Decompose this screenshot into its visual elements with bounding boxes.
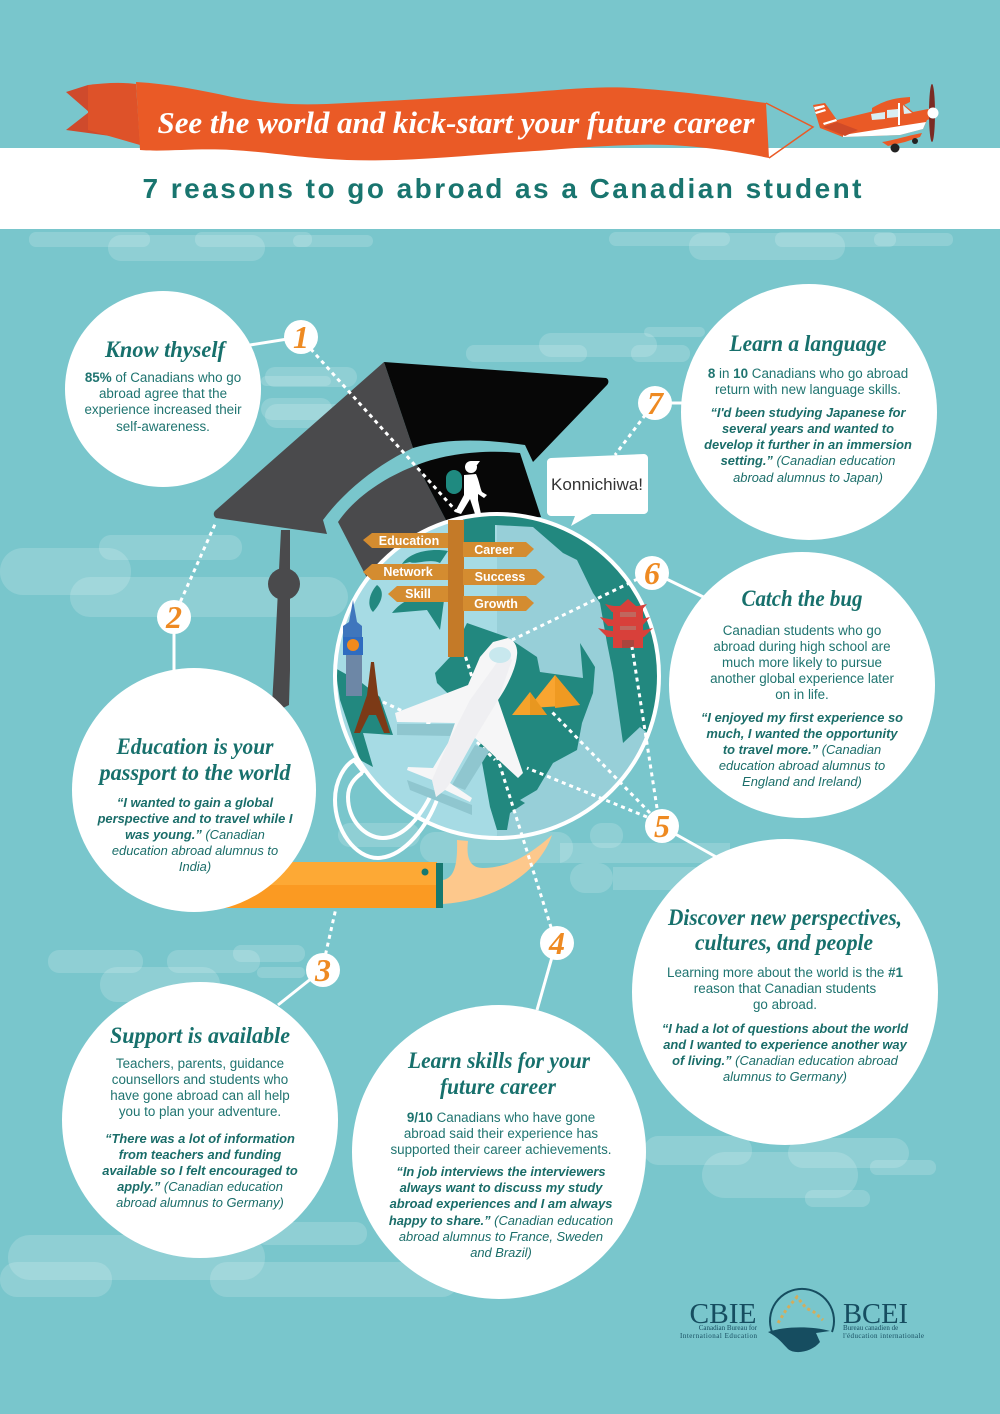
panel 5: Discover new perspectives [632, 839, 938, 1145]
panel 3: Support is available: abroad alumnus to Germany) [116, 1195, 284, 1210]
CBIE BCEI logo: Canadian Bureau for [699, 1324, 758, 1332]
speech bubble: Konnichiwa: Konnichiwa! [551, 476, 643, 494]
panel 7: Learn a language: abroad alumnus to Japan) [733, 470, 883, 485]
banner ribbon with title [66, 82, 813, 160]
panel 2: Education is your passport: perspective and to travel while I [97, 811, 293, 826]
panel 7: Learn a language: develop it further in an immersion [704, 437, 912, 452]
panel 4: Learn skills for your future career [352, 1005, 646, 1299]
panel 4: Learn skills for your future career: supported their career achievements. [390, 1142, 612, 1157]
panel 4: Learn skills for your future career: 9/10 Canadians who have gone [407, 1110, 595, 1125]
panel 4: Learn skills for your future career: “In job interviews the interviewers [396, 1164, 606, 1179]
CBIE BCEI logo: CBIE [690, 1298, 756, 1330]
panel 7: Learn a language [681, 284, 937, 540]
panel 7: Learn a language: Learn a language [729, 331, 886, 356]
panel 6: Catch the bug: another global experience later [710, 671, 894, 686]
panel 6: Catch the bug: much, I wanted the opportunity [706, 726, 898, 741]
icon: pyramids [512, 675, 580, 715]
panel 3: Support is available: counsellors and students who [112, 1072, 288, 1087]
panel 2: Education is your passport: India) [179, 859, 211, 874]
badge 6: 6 [644, 555, 660, 591]
panel 3: Support is available: Teachers, parents, guidance [116, 1056, 284, 1071]
panel 6: Catch the bug: “I enjoyed my first experience so [701, 710, 903, 725]
panel 1: Know thyself: Know thyself [104, 337, 227, 362]
graduation cap [214, 362, 608, 709]
panel 6: Catch the bug [669, 552, 935, 818]
panel 5: Discover new perspectives: reason that Canadian students [694, 981, 876, 996]
badge 2: 2 [165, 599, 182, 635]
panel 4: Learn skills for your future career: abroad experiences and I am always [390, 1196, 612, 1211]
panel 4: Learn skills for your future career: abroad said their experience has [404, 1126, 598, 1141]
panel 4: Learn skills for your future career: future career [440, 1074, 557, 1099]
panel 6: Catch the bug: Canadian students who go [723, 623, 881, 638]
panel 5: Discover new perspectives: go abroad. [753, 997, 817, 1012]
panel 6: Catch the bug: to travel more.” (Canadian [723, 742, 881, 757]
panel 3: Support is available: Support is available [110, 1023, 290, 1048]
signpost with labels: Skill [405, 587, 431, 601]
badge 3 [306, 952, 340, 988]
panel 6: Catch the bug: much more likely to pursue [722, 655, 882, 670]
panel 1: Know thyself: 85% of Canadians who go [85, 370, 241, 385]
flight trail loops [335, 760, 438, 858]
banner ribbon with title: See the world and kick-start your future career [158, 105, 755, 140]
badge 1: 1 [293, 319, 309, 355]
panel 4: Learn skills for your future career: and Brazil) [470, 1245, 532, 1260]
panel 2: Education is your passport: “I wanted to gain a global [117, 795, 273, 810]
panel 3: Support is available: “There was a lot of information [105, 1131, 295, 1146]
CBIE BCEI logo: BCEI [843, 1298, 908, 1330]
badge 4 [540, 925, 574, 961]
panel 1: Know thyself: self-awareness. [116, 419, 210, 434]
panel 2: Education is your passport: passport to the world [98, 760, 291, 785]
badge 1 [284, 319, 318, 355]
icon: red plane towing banner [813, 84, 938, 152]
badge 3: 3 [314, 952, 331, 988]
hand holding the globe [225, 835, 552, 908]
CBIE BCEI logo: Bureau canadien de [843, 1324, 898, 1332]
icon: Big Ben [343, 600, 363, 696]
panel 7: Learn a language: return with new language skills. [715, 382, 901, 397]
panel 4: Learn skills for your future career: abroad alumnus to France, Sweden [399, 1229, 603, 1244]
panel 5: Discover new perspectives: alumnus to Germany) [723, 1069, 847, 1084]
panel 3: Support is available: apply.” (Canadian education [117, 1179, 283, 1194]
CBIE BCEI logo [680, 1289, 924, 1352]
airplane [395, 638, 523, 815]
panel 5: Discover new perspectives: cultures, and people [695, 930, 873, 955]
panel 6: Catch the bug: England and Ireland) [742, 774, 862, 789]
panel 7: Learn a language: setting.” (Canadian education [721, 453, 895, 468]
subtitle: 7 reasons to go abroad as a Canadian student [142, 173, 862, 204]
panel 1: Know thyself [65, 291, 261, 487]
icon: Eiffel Tower [354, 662, 390, 733]
panel 6: Catch the bug: Catch the bug [742, 586, 862, 611]
badge 5 [645, 808, 679, 844]
signpost with labels: Network [383, 565, 433, 579]
panel 5: Discover new perspectives: and I wanted to experience another way [663, 1037, 908, 1052]
globe [333, 512, 661, 840]
badge 7 [638, 385, 672, 421]
panel 5: Discover new perspectives: Discover new perspectives, [667, 905, 902, 930]
signpost with labels: Success [475, 570, 525, 584]
badge 2 [157, 599, 191, 635]
panel 2: Education is your passport: education abroad alumnus to [112, 843, 278, 858]
badge 5: 5 [654, 808, 670, 844]
panel 3: Support is available: available so I felt encouraged to [102, 1163, 298, 1178]
speech bubble: Konnichiwa [547, 454, 648, 526]
CBIE BCEI logo: International Education [680, 1332, 758, 1340]
CBIE BCEI logo: l'éducation internationale [843, 1332, 924, 1340]
panel 3: Support is available: you to plan your adventure. [119, 1104, 281, 1119]
panel 5: Discover new perspectives: Learning more about the world is the #1 [667, 965, 904, 980]
dotted connector 5 lines [383, 647, 657, 817]
panel 2: Education is your passport: was young.” (Canadian [125, 827, 265, 842]
signpost with labels: Growth [474, 597, 518, 611]
badge 6 [635, 555, 669, 591]
panel 7: Learn a language: 8 in 10 Canadians who go abroad [708, 366, 908, 381]
panel 3: Support is available: from teachers and funding [119, 1147, 281, 1162]
panel 3: Support is available [62, 982, 338, 1258]
panel 3: Support is available: have gone abroad can all help [110, 1088, 290, 1103]
panel 1: Know thyself: experience increased their [84, 402, 242, 417]
panel 7: Learn a language: “I'd been studying Japanese for [710, 405, 906, 420]
panel 7: Learn a language: several years and wanted to [722, 421, 894, 436]
panel 5: Discover new perspectives: “I had a lot of questions about the world [662, 1021, 909, 1036]
panel 6: Catch the bug: abroad during high school are [713, 639, 891, 654]
icon: hiker [446, 461, 487, 514]
panel 1: Know thyself: abroad agree that the [99, 386, 227, 401]
signpost with labels: Career [474, 543, 514, 557]
panel 2: Education is your passport [72, 668, 316, 912]
panel 4: Learn skills for your future career: happy to share.” (Canadian education [389, 1213, 613, 1228]
panel 4: Learn skills for your future career: always want to discuss my study [400, 1180, 603, 1195]
header white band [0, 148, 1000, 229]
signpost with labels [363, 520, 545, 657]
signpost with labels: Education [379, 534, 439, 548]
panel 6: Catch the bug: education abroad alumnus to [719, 758, 885, 773]
panel 6: Catch the bug: on in life. [775, 687, 829, 702]
connector lines [174, 337, 722, 1010]
badge 4: 4 [548, 925, 565, 961]
icon: pagoda [598, 599, 653, 648]
panel 4: Learn skills for your future career: Learn skills for your [407, 1048, 591, 1073]
panel 2: Education is your passport: Education is your [116, 734, 274, 759]
badge 7: 7 [647, 385, 665, 421]
panel 5: Discover new perspectives: of living.” (Canadian education abroad [672, 1053, 899, 1068]
